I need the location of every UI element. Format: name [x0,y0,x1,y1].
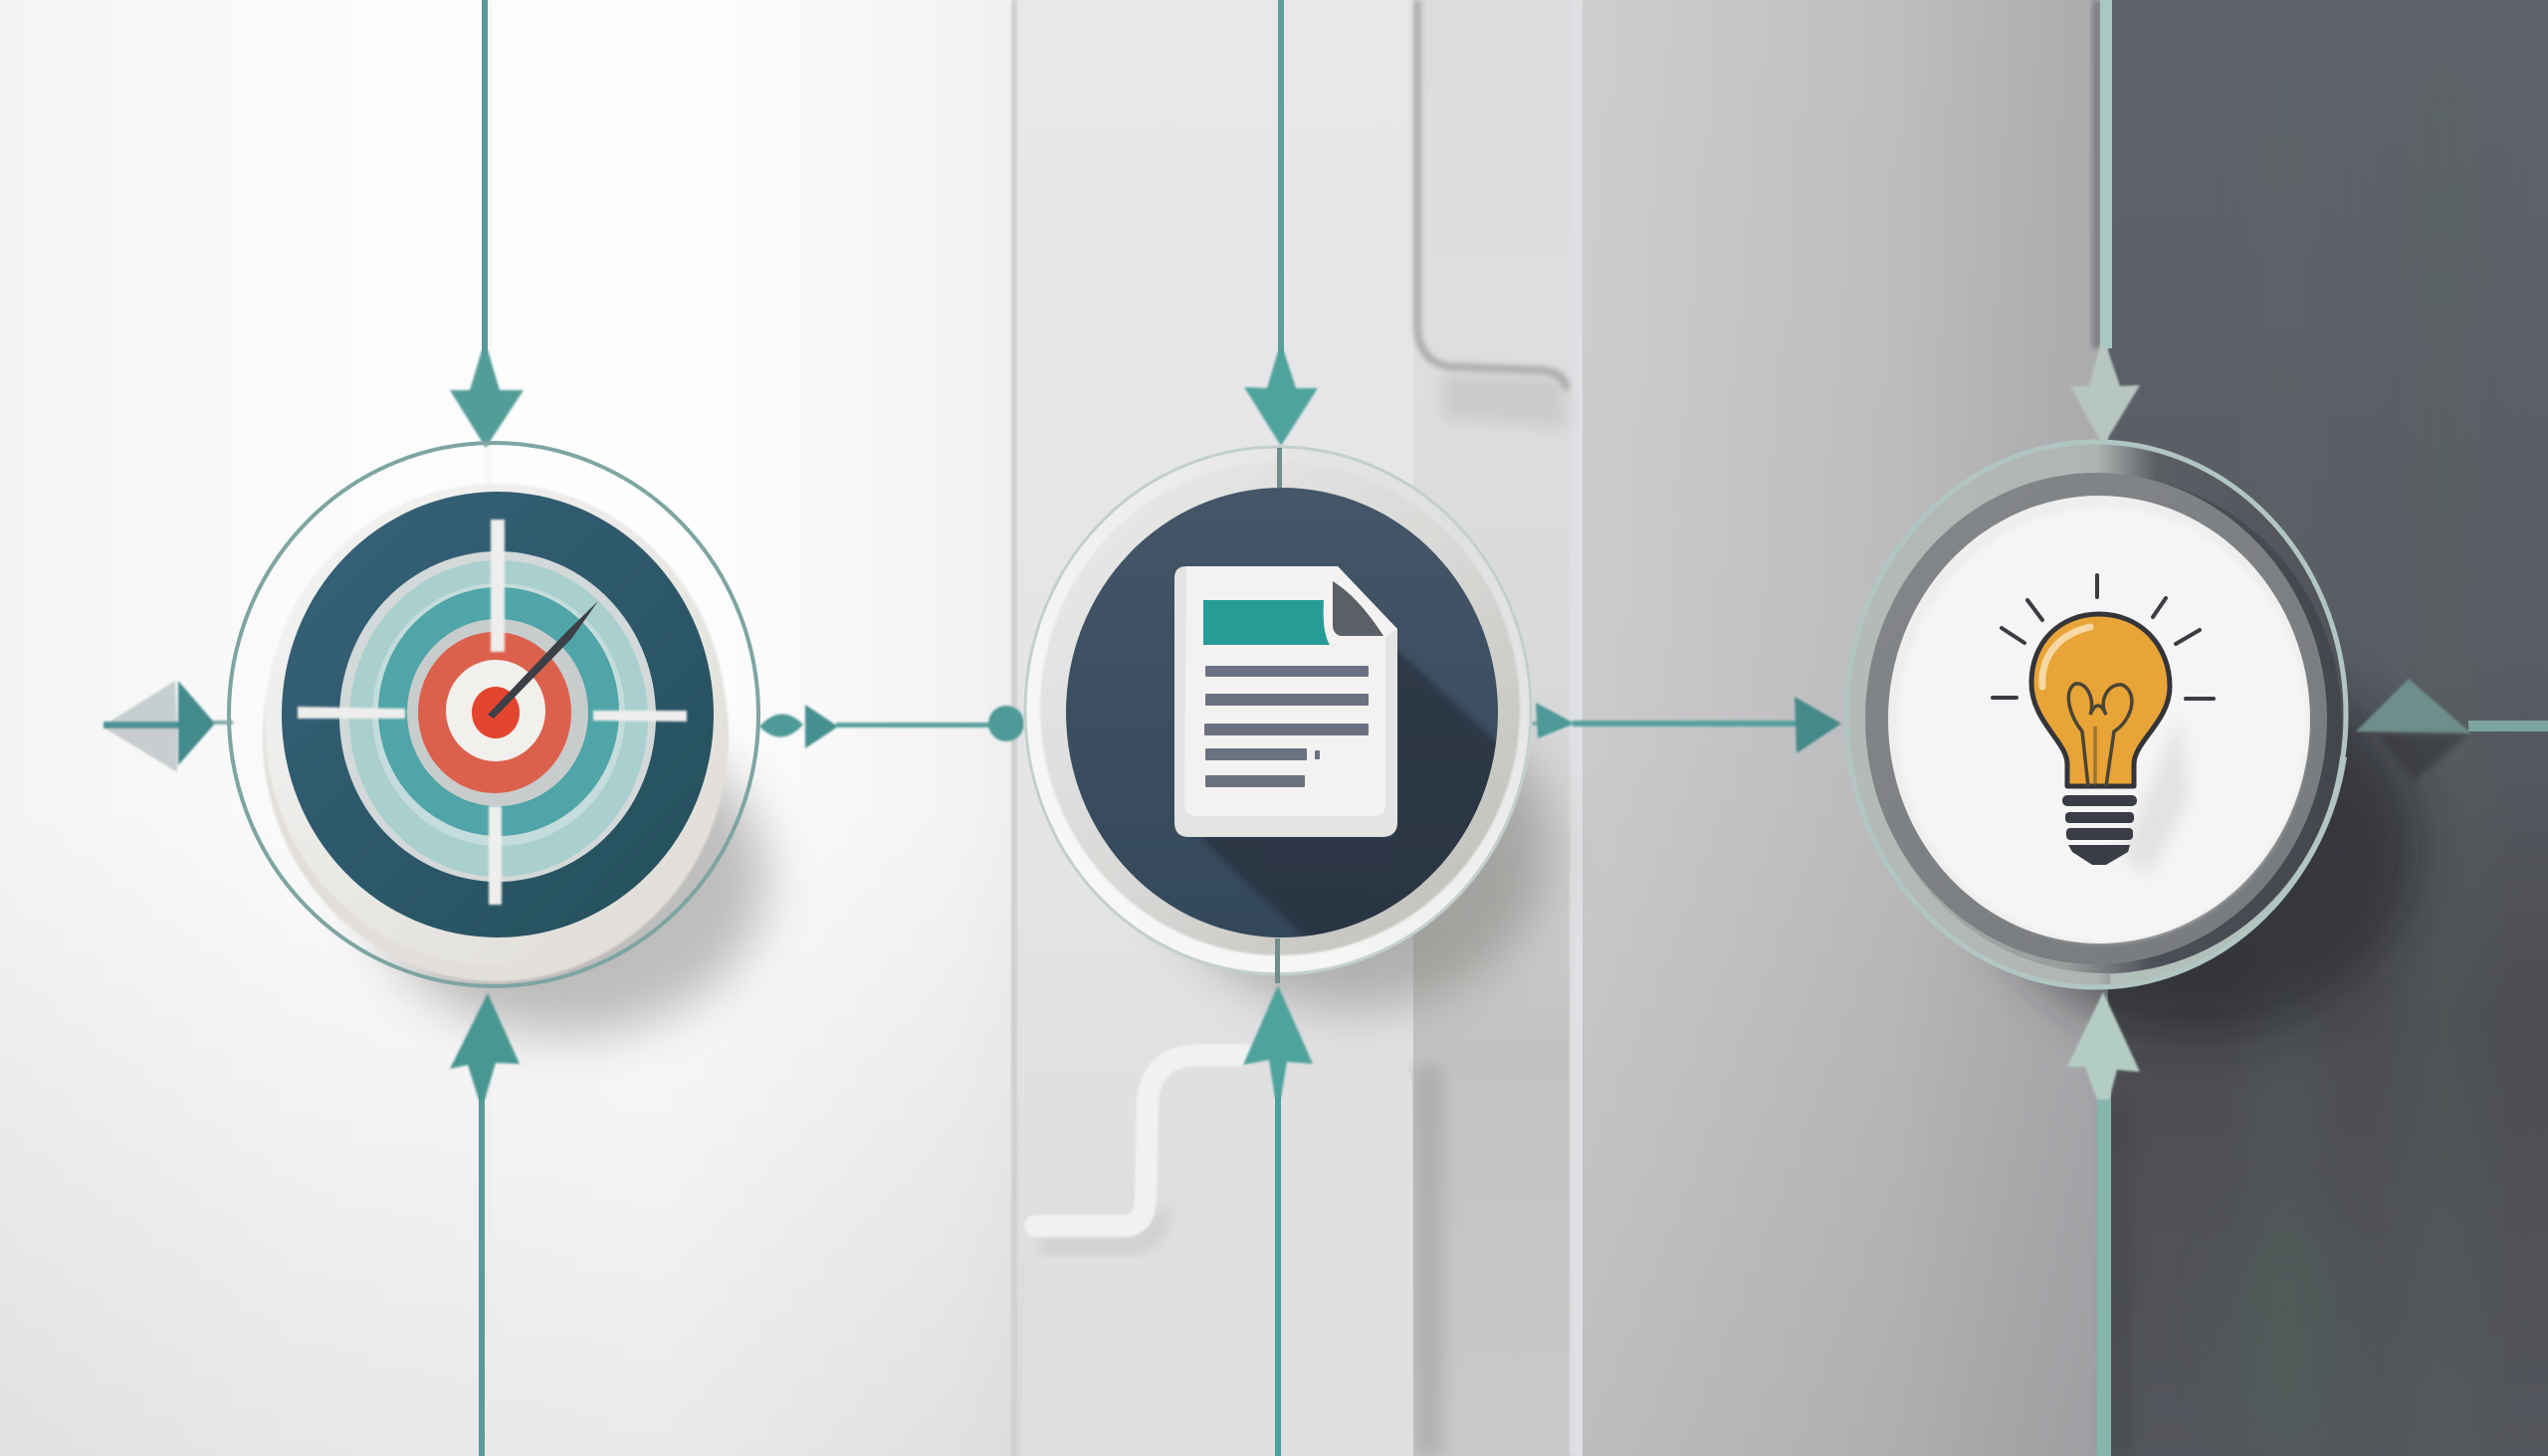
bulb icon [1993,575,2214,865]
lower right pale band [2110,756,2341,980]
rays [1993,575,2214,699]
outer ring [1025,447,1531,974]
navy disc [1066,488,1498,937]
filament [2068,684,2132,786]
arrow: bottom into document [1243,985,1313,1456]
connector: document to idea [1498,697,1841,753]
arrow: top into idea [2070,0,2140,446]
outer plate [1024,448,1532,973]
arrow: left of target [104,681,233,772]
arrow: bottom into idea [2067,992,2140,1456]
cast shadow [1200,649,1497,936]
page face [1184,566,1397,816]
bulb shadow [2120,717,2190,876]
medallion: idea bulb [1846,442,2346,987]
text lines [1204,666,1369,787]
screw base [2062,795,2137,865]
medallion: target [229,443,758,986]
pale plate [1846,442,2346,987]
dark ring [1868,476,2342,973]
crosshair [298,520,687,905]
inner crescent [1040,462,1520,955]
white ring [446,660,545,761]
grey ring [407,619,588,806]
ring spokes [1275,448,1282,983]
white face [1888,496,2310,943]
dark teal disc [282,492,714,937]
panel: bottom stepped shape [1021,1053,1413,1456]
pale ring [339,551,656,882]
folded corner [1333,581,1383,636]
outer thin ring [229,443,758,986]
medallion: document [1024,447,1532,983]
connector: target to document [759,705,1068,748]
grey ring [1865,473,2327,964]
panel: light grey background centre [1011,0,1584,1456]
arrow: top into target [450,0,524,448]
panel: mid grey background [1583,0,2112,1456]
shadows cast by medallions [368,657,2419,1035]
arrow: top into document [1244,0,1318,446]
glass [2031,614,2170,786]
teal ring [372,583,625,846]
red ring [418,632,571,793]
document icon [1174,566,1397,837]
teal header [1203,600,1330,645]
arrow: bottom into target [450,993,520,1456]
panel: white background left [0,0,1015,1456]
bullseye [472,687,520,738]
page base [1174,566,1397,837]
cream plate [263,484,729,981]
outer ring [1846,442,2346,987]
panel: dark background right [2108,0,2548,1456]
highlight [2042,627,2090,687]
panel: top notch shape [1417,0,1569,428]
arrow: right into idea [2356,679,2548,781]
dart [488,601,598,719]
